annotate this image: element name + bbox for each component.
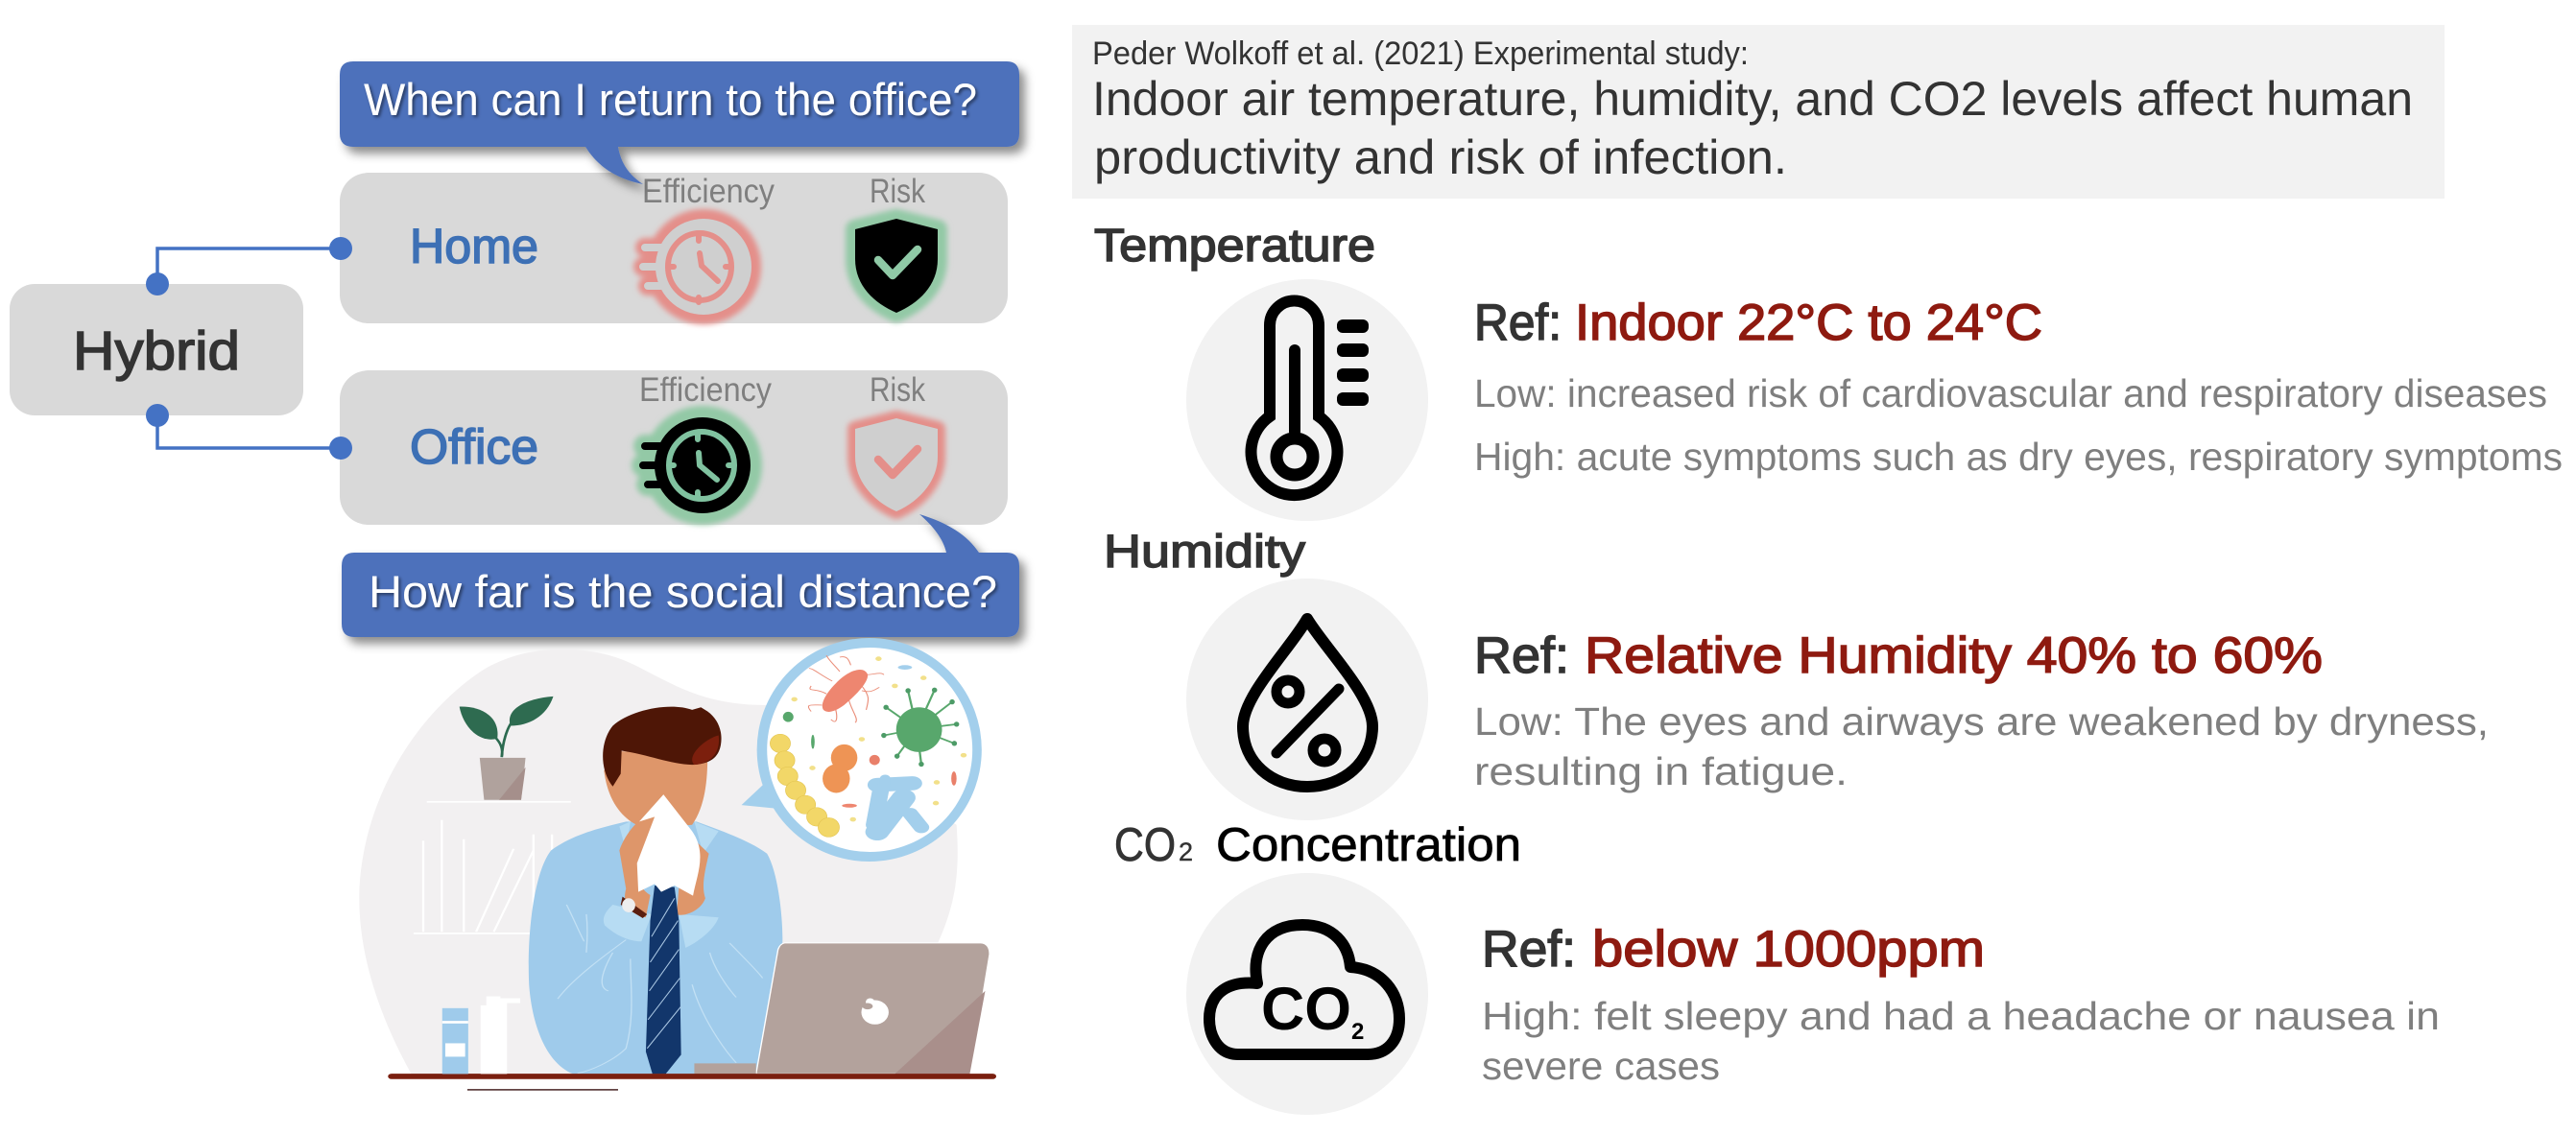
panel: hybrid	[10, 284, 303, 415]
heading: co2 concentration: CO	[1114, 819, 1176, 871]
icon: humidity drop	[1186, 579, 1428, 820]
germ bubble	[742, 638, 982, 862]
heading: humidity: Humidity	[1104, 527, 1305, 578]
details: co2: severe cases	[1482, 1044, 1720, 1088]
callout: return to office	[340, 61, 1019, 184]
panel: office	[340, 370, 1008, 525]
laptop	[694, 943, 990, 1074]
blue bottle	[442, 1008, 468, 1074]
section: co2	[1114, 819, 2440, 1115]
green virus	[881, 688, 959, 767]
details: co2: High: felt sleepy and had a headache or nausea in	[1482, 994, 2440, 1038]
icon: office efficiency clock, green	[643, 417, 751, 513]
red bacterium	[808, 655, 884, 722]
statement: Indoor air temperature, humidity, and CO2 levels affect human	[1092, 72, 2413, 126]
white spray bottle	[481, 997, 520, 1074]
icon: home risk shield, green	[855, 219, 938, 313]
details: humidity: resulting in fatigue.	[1474, 749, 1848, 793]
callout text: When can I return to the office?	[364, 74, 977, 125]
panel: home	[340, 173, 1008, 323]
heading box: study summary	[1072, 25, 2445, 199]
background blob	[359, 650, 958, 1075]
reference: co2: Ref:	[1482, 921, 1576, 978]
reference: humidity: Relative Humidity 40% to 60%	[1585, 627, 2323, 684]
reference: temperature: Indoor 22°C to 24°C	[1575, 295, 2042, 351]
person: left hand	[619, 815, 655, 917]
callout text: How far is the social distance?	[369, 566, 997, 617]
details: humidity: Low: The eyes and airways are weakened by dryness,	[1474, 699, 2489, 744]
icon: home efficiency clock, red	[643, 219, 751, 315]
heading: temperature: Temperature	[1094, 221, 1375, 272]
tie stripes	[647, 898, 680, 1049]
person: shirt	[529, 821, 782, 1074]
illustration: sick office worker	[359, 638, 996, 1091]
person: hair	[603, 707, 722, 787]
connector: hybrid to home	[146, 237, 352, 295]
hybrid label: Hybrid	[73, 320, 240, 382]
person: shirt fold lines	[558, 905, 763, 1074]
person: cuffs	[604, 905, 719, 948]
icon: co2 cloud	[1186, 873, 1428, 1115]
tissue	[637, 794, 700, 896]
blue rod bacteria	[874, 778, 921, 832]
bookshelf	[414, 802, 571, 933]
details: temperature: High: acute symptoms such as dry eyes, respiratory symptoms	[1474, 435, 2563, 479]
section: temperature	[1094, 221, 2563, 521]
yellow chain bacteria	[770, 734, 840, 837]
reference: humidity: Ref:	[1474, 627, 1569, 684]
orange bacteria	[823, 744, 857, 792]
small particles	[783, 656, 966, 821]
heading: co2 concentration: 2	[1179, 838, 1193, 866]
person: collar	[619, 821, 719, 854]
connector: hybrid to office	[146, 404, 352, 460]
citation: Peder Wolkoff et al. (2021) Experimental study:	[1092, 35, 1749, 72]
home label: Home	[410, 219, 538, 273]
icon: office risk shield, red	[855, 418, 938, 511]
details: temperature: Low: increased risk of cardiovascular and respiratory diseases	[1474, 371, 2547, 415]
statement: productivity and risk of infection.	[1094, 130, 1787, 184]
icon: thermometer	[1186, 279, 1428, 521]
reference: temperature: Ref:	[1474, 295, 1562, 351]
callout: social distance	[342, 514, 1019, 637]
details: humidity	[1474, 699, 2489, 793]
details: temperature	[1474, 371, 2563, 479]
desk	[388, 1074, 996, 1079]
person: tie	[646, 886, 681, 1074]
home risk label: Risk	[870, 173, 925, 210]
reference: co2: below 1000ppm	[1592, 921, 1985, 978]
office efficiency label: Efficiency	[639, 371, 772, 409]
section: humidity	[1104, 527, 2489, 820]
plant	[460, 697, 553, 800]
office risk label: Risk	[870, 371, 925, 409]
person: right hand	[677, 838, 709, 915]
icon: co2 cloud: CO	[1261, 976, 1351, 1043]
home efficiency label: Efficiency	[642, 173, 775, 210]
heading: co2 concentration: Concentration	[1216, 819, 1521, 871]
statement	[1092, 72, 2413, 184]
watch	[621, 897, 647, 918]
details: co2	[1482, 994, 2440, 1088]
icon: co2 cloud: 2	[1351, 1019, 1364, 1045]
desk shadow line	[467, 1089, 618, 1091]
office label: Office	[410, 419, 538, 474]
person: head	[604, 751, 707, 828]
person: hair highlight	[692, 736, 719, 765]
